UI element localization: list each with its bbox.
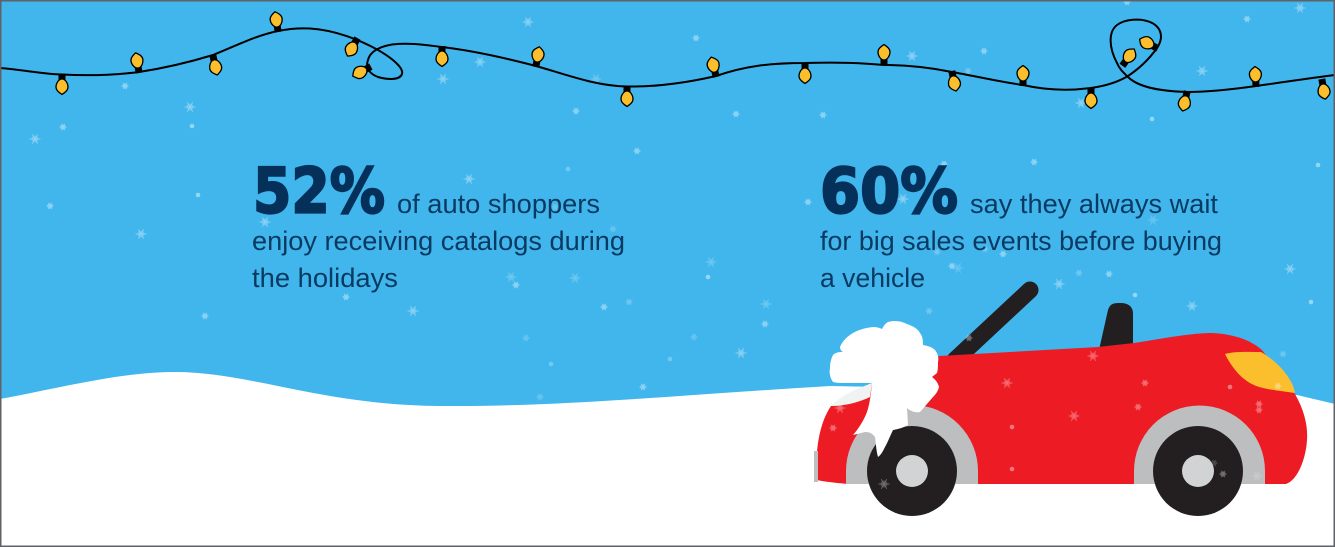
stat: 60 percent [820, 154, 1222, 293]
stat text 60: a vehicle [820, 263, 925, 293]
stat text 52 [252, 189, 625, 293]
snowflakes in sky [30, 0, 1320, 400]
car body [816, 333, 1307, 484]
stat text 52: enjoy receiving catalogs during [252, 226, 625, 256]
red convertible car [814, 290, 1307, 516]
big number 52%: 52% [253, 154, 385, 228]
windshield frame [955, 290, 1030, 360]
stat text 52: of auto shoppers [397, 189, 600, 219]
big number 60%: 60% [820, 154, 958, 228]
snowflakes on car [829, 335, 1282, 489]
bulbs [56, 11, 1331, 112]
seat [1099, 303, 1133, 350]
stat text 52: the holidays [252, 263, 398, 293]
rear wheel [1134, 406, 1265, 516]
stat text 60 [820, 189, 1222, 293]
white bow [830, 321, 939, 457]
bumper [814, 451, 818, 482]
snow hill [0, 372, 1335, 547]
stat: 52 percent [252, 154, 625, 293]
stat text 60: for big sales events before buying [820, 226, 1222, 256]
string of lights [0, 11, 1335, 112]
stat text 60: say they always wait [970, 189, 1218, 219]
headlight [1225, 352, 1295, 393]
front wheel [846, 405, 978, 516]
wire [0, 20, 1335, 92]
